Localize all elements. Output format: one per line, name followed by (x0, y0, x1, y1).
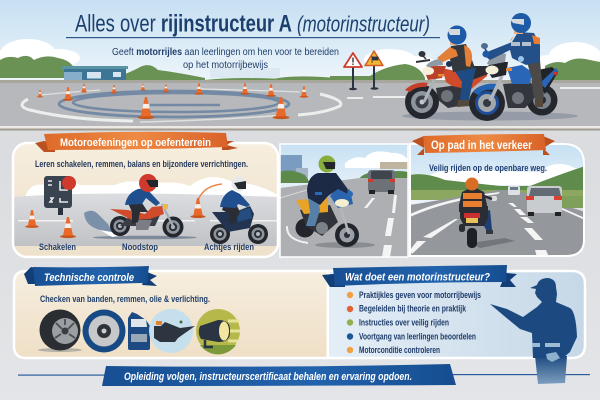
icon: gear lever diagram (44, 176, 76, 215)
icon: headlamp (196, 309, 240, 354)
list: taken (347, 290, 481, 355)
motorcycle with rider (296, 156, 375, 248)
intro text: Veilig rijden op de openbare weg. (429, 163, 547, 173)
rider from behind (459, 178, 515, 248)
list: taken: Praktijkles geven voor motorrijbewijs (359, 290, 481, 300)
distant car (508, 186, 520, 195)
banner: wat doet een motorinstructeur: Wat doet een motorinstructeur? (345, 272, 490, 284)
panel: street riding scene (280, 144, 408, 257)
icon: figure-eight motorcycle (190, 176, 268, 244)
car right (526, 186, 562, 216)
labels (39, 242, 254, 253)
icon: oil jug (128, 312, 150, 350)
banner: op pad in het verkeer: Op pad in het verkeer (431, 138, 532, 152)
car ahead (368, 170, 395, 194)
blue motorcycle with rider (469, 13, 558, 121)
labels: Noodstop (122, 242, 158, 253)
icon: brake disc (82, 310, 126, 352)
banner: op pad in het verkeer (412, 134, 555, 155)
banner: motoroefeningen: Motoroefeningen op oefenterrein (60, 137, 211, 149)
cones (25, 210, 76, 238)
list: taken: Instructies over veilig rijden (359, 318, 449, 328)
list: taken: Begeleiden bij theorie en praktijk (359, 304, 467, 314)
road signs (344, 51, 383, 90)
training building (62, 66, 128, 83)
rider (527, 60, 544, 98)
panel: technische controle and taken (14, 271, 585, 358)
list: taken: Motorconditie controleren (359, 345, 440, 355)
labels: Schakelen (39, 242, 76, 253)
intro text: technische controle: Checken van banden, remmen, olie & verlichting. (40, 294, 210, 304)
icon: oil can (149, 309, 195, 353)
subtitle: op het motorrijbewijs (183, 60, 268, 71)
icon: tire (38, 310, 82, 352)
banner: technische controle: Technische controle (44, 272, 134, 284)
clouds in panel (26, 177, 277, 197)
subtitle (112, 47, 339, 71)
subtitle: Geeft motorrijles aan leerlingen om hen voor te bereiden (112, 47, 339, 58)
intro text: Leren schakelen, remmen, balans en bijzondere verrichtingen. (35, 159, 248, 169)
cones on the course (37, 83, 308, 119)
banner: technische controle (24, 266, 157, 286)
icon: emergency stop motorcycle (84, 174, 197, 239)
title: Alles over rijinstructeur A (motorinstructeur) (75, 10, 430, 38)
bottom banner: Opleiding volgen, instructeurscertificaat behalen en ervaring opdoen. (124, 371, 412, 383)
clouds (0, 39, 600, 72)
bottom banner (18, 364, 590, 386)
trees (0, 56, 600, 80)
banner: motoroefeningen (35, 132, 238, 152)
silhouette: instructor (490, 278, 577, 384)
list: taken: Voortgang van leerlingen beoordelen (359, 332, 476, 342)
motorcycle shadow (402, 112, 578, 120)
labels: Achtjes rijden (204, 242, 254, 253)
hero scene (0, 0, 600, 130)
red motorcycle with rider (405, 26, 488, 119)
panel: motoroefeningen (13, 143, 278, 257)
exercise circles on the ground (22, 89, 341, 122)
rider (454, 68, 476, 100)
banner: wat doet een motorinstructeur (322, 265, 517, 287)
panel: op pad in het verkeer (410, 144, 585, 257)
